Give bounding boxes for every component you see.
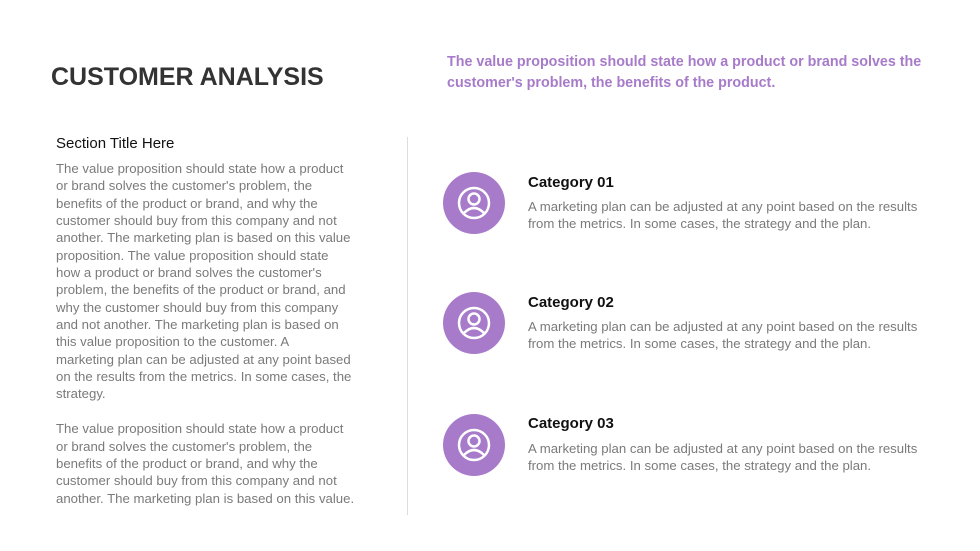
left text block: problem, the benefits of the product or brand, and: [56, 282, 346, 297]
icon: user: [443, 172, 505, 234]
subtitle callout: The value proposition should state how a product or brand solves the: [447, 54, 921, 70]
subtitle callout: [447, 54, 921, 91]
text: A marketing plan can be adjusted at any point based on the results: [528, 199, 917, 214]
text: [528, 319, 917, 351]
left text block: or brand solves the customer's problem, the: [56, 178, 312, 193]
text: from the metrics. In some cases, the strategy and the plan.: [528, 336, 871, 351]
icon: user: [443, 292, 505, 354]
title: CUSTOMER ANALYSIS: [51, 63, 324, 91]
icon: user: [443, 414, 505, 476]
left text block: another. The marketing plan is based on this value: [56, 230, 350, 245]
text: [528, 441, 917, 473]
heading: Category 01: [528, 174, 614, 191]
left text block: proposition. The value proposition should state: [56, 248, 328, 263]
left text block: why the customer should buy from this company: [56, 300, 338, 315]
left text block: on the results from the metrics. In some cases, the: [56, 369, 351, 384]
category 01: [443, 172, 917, 234]
left text block: customer should buy from this company and not: [56, 213, 337, 228]
subtitle callout: customer's problem, the benefits of the product.: [447, 75, 775, 91]
left text block: this value proposition to the customer. A: [56, 334, 289, 349]
text: [528, 199, 917, 231]
text: from the metrics. In some cases, the strategy and the plan.: [528, 216, 871, 231]
left text block: The value proposition should state how a product: [56, 421, 343, 436]
text: from the metrics. In some cases, the strategy and the plan.: [528, 458, 871, 473]
left text block: customer should buy from this company and not: [56, 473, 337, 488]
category 03: [443, 414, 917, 476]
left text block: how a product or brand solves the customer's: [56, 265, 322, 280]
section title: Section Title Here: [56, 135, 174, 152]
heading: Category 03: [528, 415, 614, 432]
left text block: [56, 161, 354, 506]
left text block: or brand solves the customer's problem, the: [56, 438, 312, 454]
left text block: strategy.: [56, 386, 106, 401]
left text block: benefits of the product or brand, and why the: [56, 196, 318, 211]
category 02: [443, 292, 917, 354]
text: A marketing plan can be adjusted at any point based on the results: [528, 441, 917, 456]
text: A marketing plan can be adjusted at any point based on the results: [528, 319, 917, 334]
heading: Category 02: [528, 294, 614, 311]
left text block: The value proposition should state how a product: [56, 161, 343, 176]
left text block: marketing plan can be adjusted at any point based: [56, 352, 351, 367]
left text block: another. The marketing plan is based on this value.: [56, 491, 354, 506]
left text block: and not another. The marketing plan is based on: [56, 317, 339, 332]
left text block: benefits of the product or brand, and why the: [56, 456, 318, 471]
